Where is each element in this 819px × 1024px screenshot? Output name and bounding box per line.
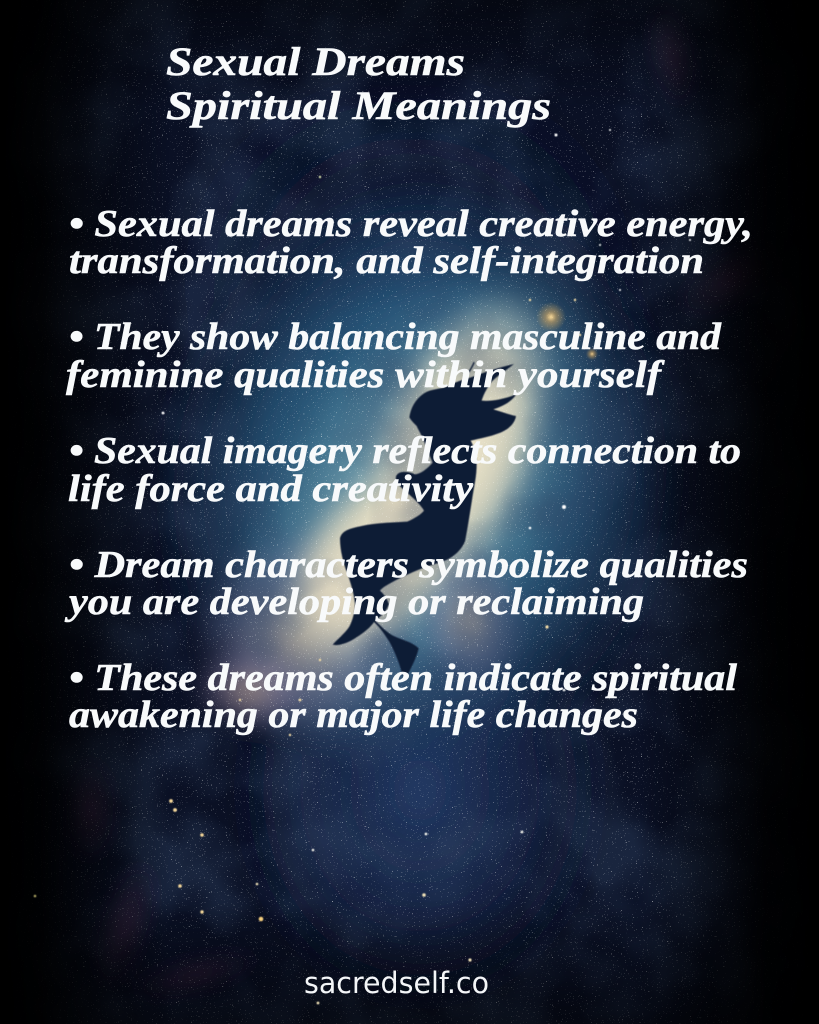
title: Spiritual Meanings bbox=[166, 83, 551, 128]
bullet 5 bbox=[69, 657, 737, 736]
bullet 3: • Sexual imagery reflects connection to bbox=[69, 430, 741, 472]
bullet 1 bbox=[69, 203, 753, 282]
bullet 3 bbox=[68, 430, 741, 510]
bullet 4 bbox=[65, 544, 748, 623]
bullet 4: • Dream characters symbolize qualities bbox=[69, 544, 748, 586]
bullet 1: • Sexual dreams reveal creative energy, bbox=[69, 203, 753, 245]
bullet 3: life force and creativity bbox=[68, 468, 473, 510]
footer website: sacredself.co bbox=[304, 966, 489, 1000]
bullet 2: • They show balancing masculine and bbox=[69, 316, 722, 358]
bullet 2: feminine qualities within yourself bbox=[66, 354, 665, 396]
silhouette: floating woman with flowing hair bbox=[333, 363, 517, 677]
hair strand bbox=[463, 363, 474, 381]
bullet 2 bbox=[66, 316, 722, 396]
bullet 5: • These dreams often indicate spiritual bbox=[69, 657, 737, 699]
title bbox=[166, 39, 551, 128]
bullet list bbox=[65, 203, 753, 736]
bullet 4: you are developing or reclaiming bbox=[65, 581, 644, 623]
bullet 1: transformation, and self-integration bbox=[69, 240, 704, 282]
nebula glow bbox=[98, 60, 742, 1015]
bright stars bbox=[34, 129, 691, 1004]
title: Sexual Dreams bbox=[166, 39, 465, 84]
bullet 5: awakening or major life changes bbox=[69, 694, 638, 736]
